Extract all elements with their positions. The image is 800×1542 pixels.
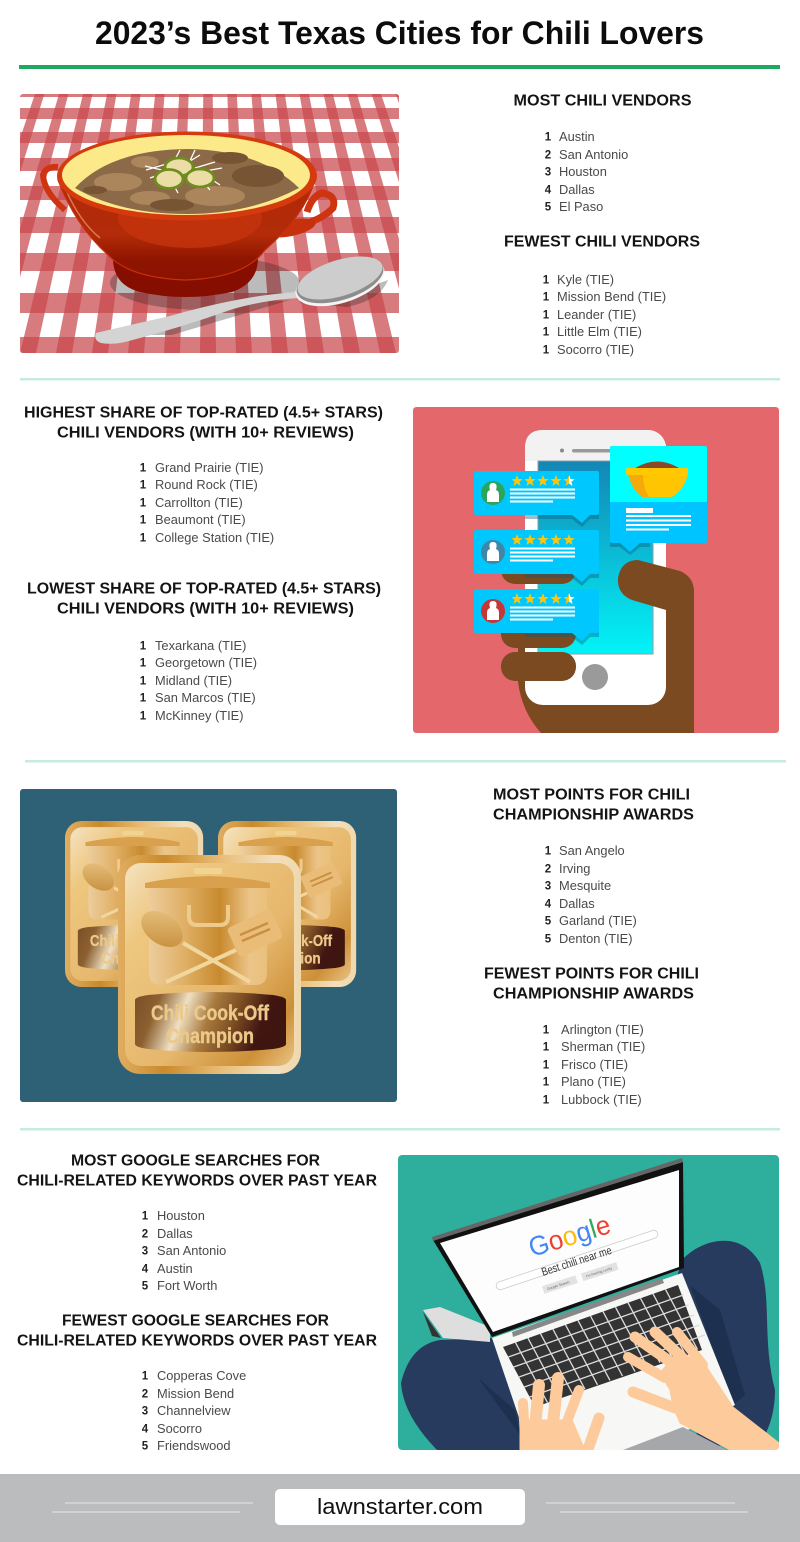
medal: front: Chili Cook-Off bbox=[151, 1002, 270, 1025]
medal: back right bbox=[218, 821, 356, 987]
list: highest share of top-rated vendors: Round Rock (TIE) bbox=[155, 477, 258, 492]
phone bbox=[525, 430, 666, 705]
list: fewest google searches: 1 bbox=[142, 1370, 149, 1382]
review bubble 3 bbox=[474, 589, 599, 645]
list: fewest championship points bbox=[484, 966, 699, 1107]
list: highest share of top-rated vendors: 1 bbox=[140, 480, 147, 492]
list: highest share of top-rated vendors: Beaumont (TIE) bbox=[155, 512, 246, 527]
list: highest share of top-rated vendors: 1 bbox=[140, 462, 147, 474]
list: fewest championship points: Sherman (TIE) bbox=[561, 1039, 645, 1054]
illustration: chili cook-off medals bbox=[20, 789, 397, 1102]
laptop base bbox=[492, 1273, 735, 1450]
list: highest share of top-rated vendors bbox=[24, 404, 383, 545]
list: lowest share of top-rated vendors: San Marcos (TIE) bbox=[155, 690, 256, 705]
fingers bbox=[501, 574, 576, 681]
medal: front bbox=[118, 855, 301, 1074]
list: most championship points: San Angelo bbox=[559, 843, 625, 858]
list: most google searches: MOST GOOGLE SEARCHES FOR bbox=[71, 1152, 320, 1170]
list: fewest championship points: CHAMPIONSHIP AWARDS bbox=[493, 986, 694, 1002]
list: fewest google searches bbox=[17, 1312, 377, 1453]
tablecloth bbox=[20, 94, 399, 353]
list: highest share of top-rated vendors: College Station (TIE) bbox=[155, 530, 274, 545]
list: fewest google searches: Channelview bbox=[157, 1403, 231, 1418]
search buttons bbox=[542, 1262, 619, 1294]
list: fewest chili vendors bbox=[504, 234, 700, 357]
list: most championship points: 5 bbox=[545, 934, 552, 946]
medal: front: Champion bbox=[166, 1025, 254, 1048]
list: fewest championship points: Frisco (TIE) bbox=[561, 1057, 628, 1072]
list: most google searches: Austin bbox=[157, 1261, 193, 1276]
list: most chili vendors: 4 bbox=[545, 184, 552, 196]
list: most championship points: Dallas bbox=[559, 896, 595, 911]
list: fewest chili vendors: 1 bbox=[543, 292, 550, 304]
list: fewest championship points: Arlington (TIE) bbox=[561, 1022, 644, 1037]
list: most chili vendors: 5 bbox=[545, 202, 552, 214]
list: fewest chili vendors: 1 bbox=[543, 326, 550, 338]
list: most championship points: MOST POINTS FOR CHILI bbox=[493, 786, 690, 804]
list: highest share of top-rated vendors: CHILI VENDORS (WITH 10+ REVIEWS) bbox=[57, 424, 354, 442]
title: 2023’s Best Texas Cities for Chili Lovers bbox=[95, 15, 704, 51]
list: fewest google searches: FEWEST GOOGLE SEARCHES FOR bbox=[62, 1312, 329, 1330]
list: fewest google searches: 4 bbox=[142, 1424, 149, 1436]
search buttons: I'm Feeling Lucky bbox=[586, 1266, 613, 1278]
footer url pill bbox=[275, 1489, 525, 1525]
shoe bbox=[423, 1307, 490, 1342]
list: lowest share of top-rated vendors: Midland (TIE) bbox=[155, 673, 232, 688]
list: most google searches: 3 bbox=[142, 1246, 148, 1258]
list: most google searches: CHILI-RELATED KEYWORDS OVER PAST YEAR bbox=[17, 1172, 377, 1190]
list: lowest share of top-rated vendors: CHILI VENDORS (WITH 10+ REVIEWS) bbox=[57, 600, 354, 618]
illustration: laptop with google search bbox=[398, 1155, 779, 1452]
bowl foot bbox=[113, 258, 258, 297]
list: fewest championship points: FEWEST POINTS FOR CHILI bbox=[484, 966, 699, 982]
list: fewest chili vendors: Kyle (TIE) bbox=[557, 272, 614, 287]
list: most championship points: CHAMPIONSHIP AWARDS bbox=[493, 806, 694, 824]
list: fewest championship points: 1 bbox=[543, 1024, 550, 1036]
footer url: lawnstarter.com bbox=[317, 1494, 483, 1519]
list: fewest championship points: Lubbock (TIE) bbox=[561, 1092, 642, 1107]
review bubble 1 bbox=[474, 471, 599, 527]
medal: back left: Champion bbox=[101, 950, 168, 968]
list: fewest chili vendors: Leander (TIE) bbox=[557, 307, 636, 322]
legs bbox=[401, 1241, 775, 1450]
list: lowest share of top-rated vendors: LOWEST SHARE OF TOP-RATED (4.5+ STARS) bbox=[27, 580, 381, 598]
google logo: Google bbox=[525, 1209, 614, 1263]
list: lowest share of top-rated vendors: Texarkana (TIE) bbox=[155, 638, 246, 653]
list: fewest chili vendors: 1 bbox=[543, 310, 550, 322]
list: fewest chili vendors: 1 bbox=[543, 274, 550, 286]
list: most chili vendors: 3 bbox=[545, 166, 551, 178]
list: most chili vendors: El Paso bbox=[559, 199, 603, 214]
list: fewest championship points: Plano (TIE) bbox=[561, 1074, 626, 1089]
list: most championship points: Denton (TIE) bbox=[559, 931, 633, 946]
list: most chili vendors: Houston bbox=[559, 164, 607, 179]
list: most google searches: 4 bbox=[142, 1264, 149, 1276]
list: lowest share of top-rated vendors: 1 bbox=[140, 692, 147, 704]
list: fewest chili vendors: FEWEST CHILI VENDORS bbox=[504, 234, 700, 250]
laptop hinge bbox=[512, 1278, 664, 1337]
keyboard bbox=[503, 1285, 710, 1407]
list: most chili vendors: Dallas bbox=[559, 182, 595, 197]
list: fewest championship points: 1 bbox=[543, 1042, 550, 1054]
list: most championship points: 4 bbox=[545, 898, 552, 910]
list: fewest google searches: 3 bbox=[142, 1406, 148, 1418]
panel background bbox=[398, 1155, 779, 1450]
list: most google searches bbox=[17, 1152, 377, 1293]
list: most google searches: San Antonio bbox=[157, 1243, 226, 1258]
medal: back right: Champion bbox=[254, 950, 321, 968]
list: most championship points: Mesquite bbox=[559, 878, 611, 893]
panel background bbox=[20, 789, 397, 1102]
bowl interior bbox=[62, 135, 310, 215]
list: fewest google searches: Friendswood bbox=[157, 1438, 231, 1453]
list: fewest google searches: Mission Bend bbox=[157, 1386, 234, 1401]
list: most championship points: Garland (TIE) bbox=[559, 913, 637, 928]
list: highest share of top-rated vendors: Carrollton (TIE) bbox=[155, 495, 243, 510]
spoon bbox=[95, 248, 390, 344]
list: most chili vendors: 1 bbox=[545, 132, 552, 144]
list: most championship points: 3 bbox=[545, 880, 551, 892]
search buttons: Google Search bbox=[547, 1280, 570, 1291]
list: highest share of top-rated vendors: 1 bbox=[140, 532, 147, 544]
list: lowest share of top-rated vendors: 1 bbox=[140, 640, 147, 652]
list: lowest share of top-rated vendors: 1 bbox=[140, 710, 147, 722]
chili bbox=[75, 149, 299, 214]
list: highest share of top-rated vendors: Grand Prairie (TIE) bbox=[155, 460, 263, 475]
right hand bbox=[628, 1332, 779, 1450]
medal: back right: Chili Cook-Off bbox=[243, 933, 333, 950]
list: fewest chili vendors: Little Elm (TIE) bbox=[557, 324, 642, 339]
list: fewest chili vendors: Mission Bend (TIE) bbox=[557, 289, 666, 304]
list: fewest google searches: 5 bbox=[142, 1440, 149, 1452]
list: most championship points: Irving bbox=[559, 861, 590, 876]
search text: Best chili near me bbox=[540, 1245, 613, 1279]
list: most championship points bbox=[493, 786, 694, 946]
list: highest share of top-rated vendors: HIGHEST SHARE OF TOP-RATED (4.5+ STARS) bbox=[24, 404, 383, 422]
list: most chili vendors: Austin bbox=[559, 129, 595, 144]
hand palm bbox=[518, 590, 694, 733]
footer lines bbox=[52, 1503, 748, 1512]
list: most championship points: 5 bbox=[545, 916, 552, 928]
list: fewest championship points: 1 bbox=[543, 1060, 550, 1072]
list: most chili vendors bbox=[514, 92, 692, 214]
cheese bbox=[145, 150, 222, 193]
thumb bbox=[618, 560, 694, 610]
list: most google searches: 1 bbox=[142, 1210, 149, 1222]
list: most championship points: 2 bbox=[545, 864, 551, 876]
list: lowest share of top-rated vendors: 1 bbox=[140, 676, 147, 688]
jalapeno slices bbox=[155, 158, 214, 188]
left hand bbox=[520, 1378, 599, 1452]
list: highest share of top-rated vendors: 1 bbox=[140, 498, 147, 510]
title rule bbox=[19, 65, 780, 69]
bowl body bbox=[58, 180, 315, 280]
list: most chili vendors: San Antonio bbox=[559, 147, 628, 162]
list: most google searches: 5 bbox=[142, 1280, 149, 1292]
panel background bbox=[413, 407, 779, 733]
illustration: phone with review bubbles bbox=[413, 407, 779, 733]
medal: back left bbox=[65, 821, 203, 987]
list: lowest share of top-rated vendors: McKinney (TIE) bbox=[155, 708, 244, 723]
bowl handles bbox=[43, 167, 334, 230]
list: lowest share of top-rated vendors: 1 bbox=[140, 658, 147, 670]
illustration: chili bowl on gingham tablecloth bbox=[20, 94, 399, 353]
list: highest share of top-rated vendors: 1 bbox=[140, 514, 147, 526]
laptop shadow on lap bbox=[623, 1427, 727, 1450]
list: most chili vendors: MOST CHILI VENDORS bbox=[514, 92, 692, 110]
list: lowest share of top-rated vendors: Georgetown (TIE) bbox=[155, 655, 257, 670]
list: most google searches: Houston bbox=[157, 1208, 205, 1223]
list: fewest chili vendors: 1 bbox=[543, 344, 550, 356]
list: fewest google searches: Socorro bbox=[157, 1421, 202, 1436]
search bar bbox=[495, 1229, 659, 1291]
list: fewest google searches: 2 bbox=[142, 1388, 148, 1400]
list: fewest chili vendors: Socorro (TIE) bbox=[557, 342, 634, 357]
list: most google searches: Dallas bbox=[157, 1226, 193, 1241]
list: most google searches: Fort Worth bbox=[157, 1278, 217, 1293]
list: fewest google searches: Copperas Cove bbox=[157, 1368, 246, 1383]
medal: back left: Chili Cook-Off bbox=[90, 933, 180, 950]
list: lowest share of top-rated vendors bbox=[27, 580, 381, 723]
bowl rim bbox=[57, 132, 317, 220]
laptop screen bbox=[432, 1158, 684, 1337]
list: most chili vendors: 2 bbox=[545, 150, 551, 162]
list: fewest google searches: CHILI-RELATED KEYWORDS OVER PAST YEAR bbox=[17, 1332, 377, 1350]
list: most google searches: 2 bbox=[142, 1228, 148, 1240]
review bubble 2 bbox=[474, 530, 599, 586]
food review bubble bbox=[610, 446, 707, 555]
list: fewest championship points: 1 bbox=[543, 1094, 550, 1106]
list: most championship points: 1 bbox=[545, 846, 552, 858]
bowl and spoon shadows bbox=[110, 256, 388, 335]
footer band bbox=[0, 1474, 800, 1542]
list: fewest championship points: 1 bbox=[543, 1076, 550, 1088]
